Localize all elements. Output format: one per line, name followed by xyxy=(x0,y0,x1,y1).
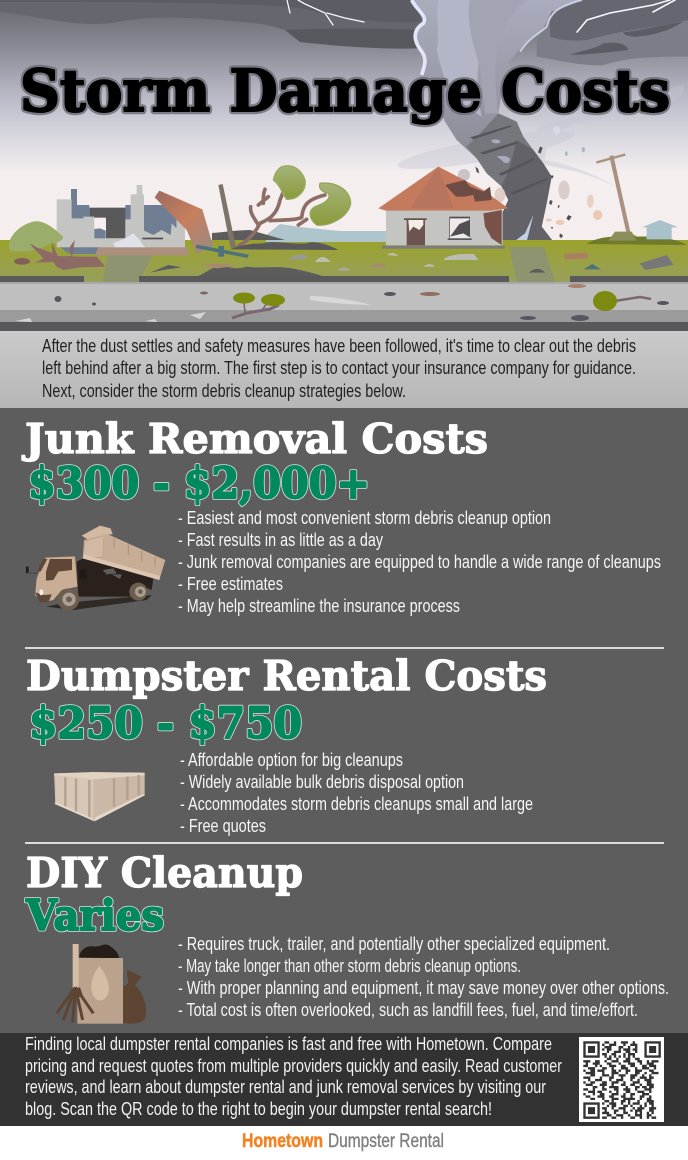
price: junk removal: $300 - $2,000+ xyxy=(28,459,370,509)
logo: Hometown Dumpster Rental: Dumpster Rental xyxy=(328,1131,444,1152)
dark horizon ridge xyxy=(212,230,285,240)
title: Storm Damage Costs xyxy=(20,57,670,125)
list: junk removal benefits: - Easiest and most convenient storm debris cleanup option xyxy=(178,508,551,528)
road xyxy=(0,282,688,331)
panel: DIY cleanup xyxy=(25,849,669,1024)
panel: footer call to action: blog. Scan the QR code to the right to begin your dumpster rental search! xyxy=(25,1099,492,1119)
house xyxy=(378,167,508,249)
heading: junk removal: Junk Removal Costs xyxy=(22,415,488,463)
list: dumpster benefits: - Widely available bulk debris disposal option xyxy=(180,772,464,792)
icon: yard waste bag and rake xyxy=(57,944,146,1024)
lawn rocks xyxy=(287,253,674,273)
price: dumpster rental: $250 - $750 xyxy=(29,699,302,749)
list: dumpster benefits xyxy=(180,750,533,836)
sky xyxy=(0,0,688,240)
price: dumpster rental: $250 - $750 xyxy=(29,699,302,749)
utility pole xyxy=(587,153,687,245)
list: junk removal benefits xyxy=(178,508,661,616)
panel: intro text: Next, consider the storm debris cleanup strategies below. xyxy=(42,381,406,401)
list: dumpster benefits: - Affordable option for big cleanups xyxy=(180,750,403,770)
heading: dumpster rental: Dumpster Rental Costs xyxy=(26,652,547,700)
panel: intro text xyxy=(0,331,688,408)
tree with foliage xyxy=(238,166,351,246)
icon: dump truck xyxy=(26,526,165,610)
QR code xyxy=(579,1037,664,1122)
list: junk removal benefits: - May help streamline the insurance process xyxy=(178,596,460,616)
hero illustration: storm scene xyxy=(0,0,688,331)
list: DIY considerations xyxy=(178,934,669,1020)
ruined building xyxy=(57,185,188,282)
price: varies: Varies xyxy=(25,891,164,940)
fallen tree left xyxy=(9,221,105,270)
icon: dumpster xyxy=(54,772,145,821)
curb xyxy=(0,276,688,282)
storm haze xyxy=(395,85,684,190)
panel: dark cost background xyxy=(0,408,688,1033)
panel: footer call to action: Finding local dumpster rental companies is fast and free with Hometown. Compare xyxy=(25,1034,552,1054)
panel: footer call to action xyxy=(0,1033,688,1126)
panel: dumpster rental xyxy=(26,652,547,836)
list: junk removal benefits: - Fast results in as little as a day xyxy=(178,530,383,550)
ground xyxy=(0,240,688,282)
panel: junk removal xyxy=(22,415,661,616)
tornado path across lawn xyxy=(509,247,555,282)
heading: DIY cleanup: DIY Cleanup xyxy=(26,849,303,897)
distant mountains xyxy=(266,224,400,242)
price: junk removal: $300 - $2,000+ xyxy=(28,459,370,509)
price: varies: Varies xyxy=(25,891,164,940)
collapsed roof and pole xyxy=(155,184,249,258)
flying debris xyxy=(458,126,602,238)
tornado funnel xyxy=(412,0,583,246)
panel: footer call to action: pricing and request quotes from multiple providers quickly and easily. Read customer xyxy=(25,1056,562,1076)
list: dumpster benefits: - Free quotes xyxy=(180,816,266,836)
list: junk removal benefits: - Free estimates xyxy=(178,574,283,594)
title: Storm Damage Costs xyxy=(20,57,670,125)
list: DIY considerations: - May take longer than other storm debris cleanup options. xyxy=(178,956,521,976)
lightning bolts xyxy=(287,0,675,32)
panel: footer call to action: reviews, and learn about dumpster rental and junk removal services by visiting our xyxy=(25,1077,546,1097)
list: dumpster benefits: - Accommodates storm debris cleanups small and large xyxy=(180,794,533,814)
storm clouds xyxy=(0,0,688,65)
logo: Hometown Dumpster Rental: Hometown xyxy=(242,1131,323,1152)
logo: Hometown Dumpster Rental xyxy=(242,1131,444,1152)
road branches xyxy=(232,291,651,318)
dirt mounds xyxy=(150,242,338,282)
